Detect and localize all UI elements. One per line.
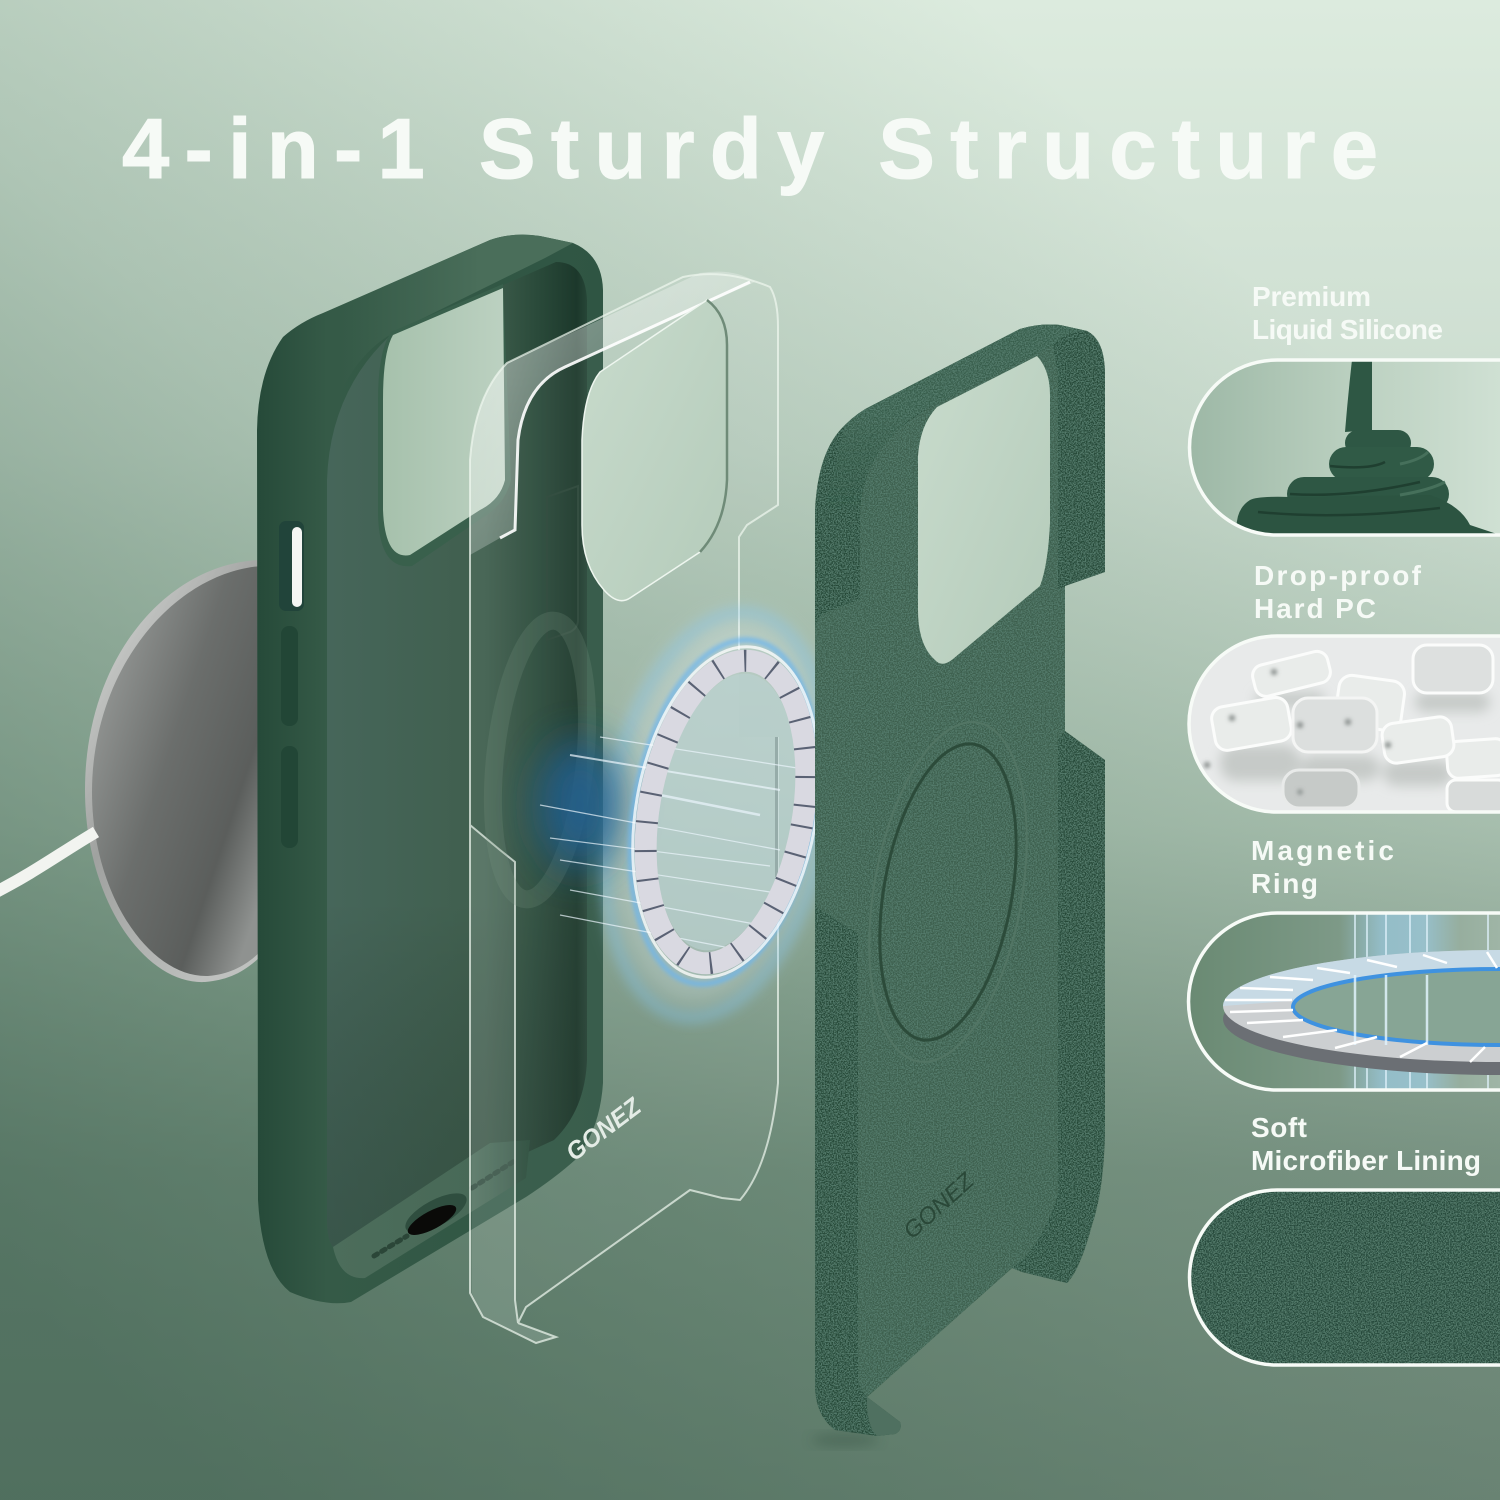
- case bottom shelf: [333, 1140, 530, 1278]
- pill background: [1189, 636, 1500, 812]
- magnetic flow streaks: [540, 737, 810, 950]
- charging port: [400, 1186, 472, 1241]
- shell outline: [470, 274, 778, 1343]
- label: Magnetic: [1251, 835, 1394, 866]
- ring inner tint: [637, 663, 815, 961]
- clear hard PC shell: [470, 272, 778, 1343]
- lining top band: [825, 324, 1087, 510]
- case outer shell: [257, 235, 603, 1303]
- panel: soft microfiber lining: [1190, 1112, 1500, 1365]
- wireless charger puck: [0, 560, 262, 982]
- case inner face: [327, 262, 587, 1247]
- panel: premium liquid silicone: [1190, 281, 1500, 535]
- blue magnetic blob: [538, 740, 622, 870]
- title: 4-in-1 Sturdy Structure: [122, 102, 1378, 197]
- label: Microfiber Lining: [1251, 1145, 1481, 1176]
- shell lower left tab: [470, 825, 556, 1343]
- magnetic ring with blue glow: [538, 594, 859, 1036]
- pill background: [1188, 913, 1500, 1090]
- bright inner edge: [500, 282, 750, 538]
- power button: [279, 521, 304, 611]
- panel: magnetic ring: [1188, 835, 1500, 1090]
- top glass reflection: [470, 272, 755, 555]
- ring segment dividers: [624, 648, 828, 976]
- label: Soft: [1251, 1112, 1307, 1143]
- ring bright edge: [608, 632, 844, 992]
- magsafe circle emboss: [845, 710, 1051, 1074]
- middle glow ring: [605, 625, 843, 999]
- shell window right shadow: [700, 300, 727, 552]
- label: Liquid Silicone: [1252, 314, 1443, 345]
- ghost ring behind shell: [481, 616, 599, 904]
- outer glow ring: [575, 594, 859, 1036]
- shell camera window: [582, 300, 727, 601]
- label: Premium: [1252, 281, 1371, 312]
- pill with fiber texture: [1190, 1190, 1500, 1365]
- silicone swirl: [1237, 360, 1500, 535]
- label: Hard PC: [1254, 593, 1376, 624]
- PC pellets: [1204, 645, 1500, 812]
- camera lip: [378, 284, 511, 566]
- pill outline: [1190, 360, 1500, 535]
- inner beams over opening: [1355, 975, 1427, 1045]
- brand mark GONEZ: GONEZ: [561, 1092, 648, 1167]
- panel: drop-proof hard PC: [1189, 560, 1500, 812]
- ring centre opening: [1293, 969, 1500, 1045]
- ring side wall: [1223, 1012, 1500, 1075]
- lining outer wall: [815, 324, 1105, 1436]
- camera cutout: [383, 288, 505, 555]
- charging cable: [0, 832, 96, 892]
- charging slot outline on inner face: [547, 486, 578, 640]
- microfiber lining shell: [815, 324, 1105, 1436]
- pill outline: [1189, 636, 1500, 812]
- magnet ring illustration: [1223, 913, 1500, 1090]
- label: Drop-proof: [1254, 560, 1422, 591]
- label: Ring: [1251, 868, 1318, 899]
- shell body: [470, 274, 778, 1343]
- volume buttons: [281, 626, 298, 848]
- brand mark on lining: GONEZ: [898, 1167, 979, 1244]
- case top band highlight: [283, 235, 573, 390]
- lining front face: [815, 345, 1065, 1397]
- pill outline: [1190, 1190, 1500, 1365]
- glow halo: [577, 598, 859, 1026]
- speaker holes: [374, 1160, 516, 1256]
- bottom clip of lining: [867, 1397, 901, 1436]
- notch shadow: [775, 737, 778, 877]
- left silicone case: [257, 235, 603, 1303]
- lining camera cutout: [918, 356, 1050, 664]
- pill background: [1190, 360, 1500, 535]
- ring dividers: [1225, 952, 1497, 1062]
- magnet ring: [624, 648, 828, 976]
- pill outline: [1188, 913, 1500, 1090]
- ring top surface: [1223, 950, 1500, 1062]
